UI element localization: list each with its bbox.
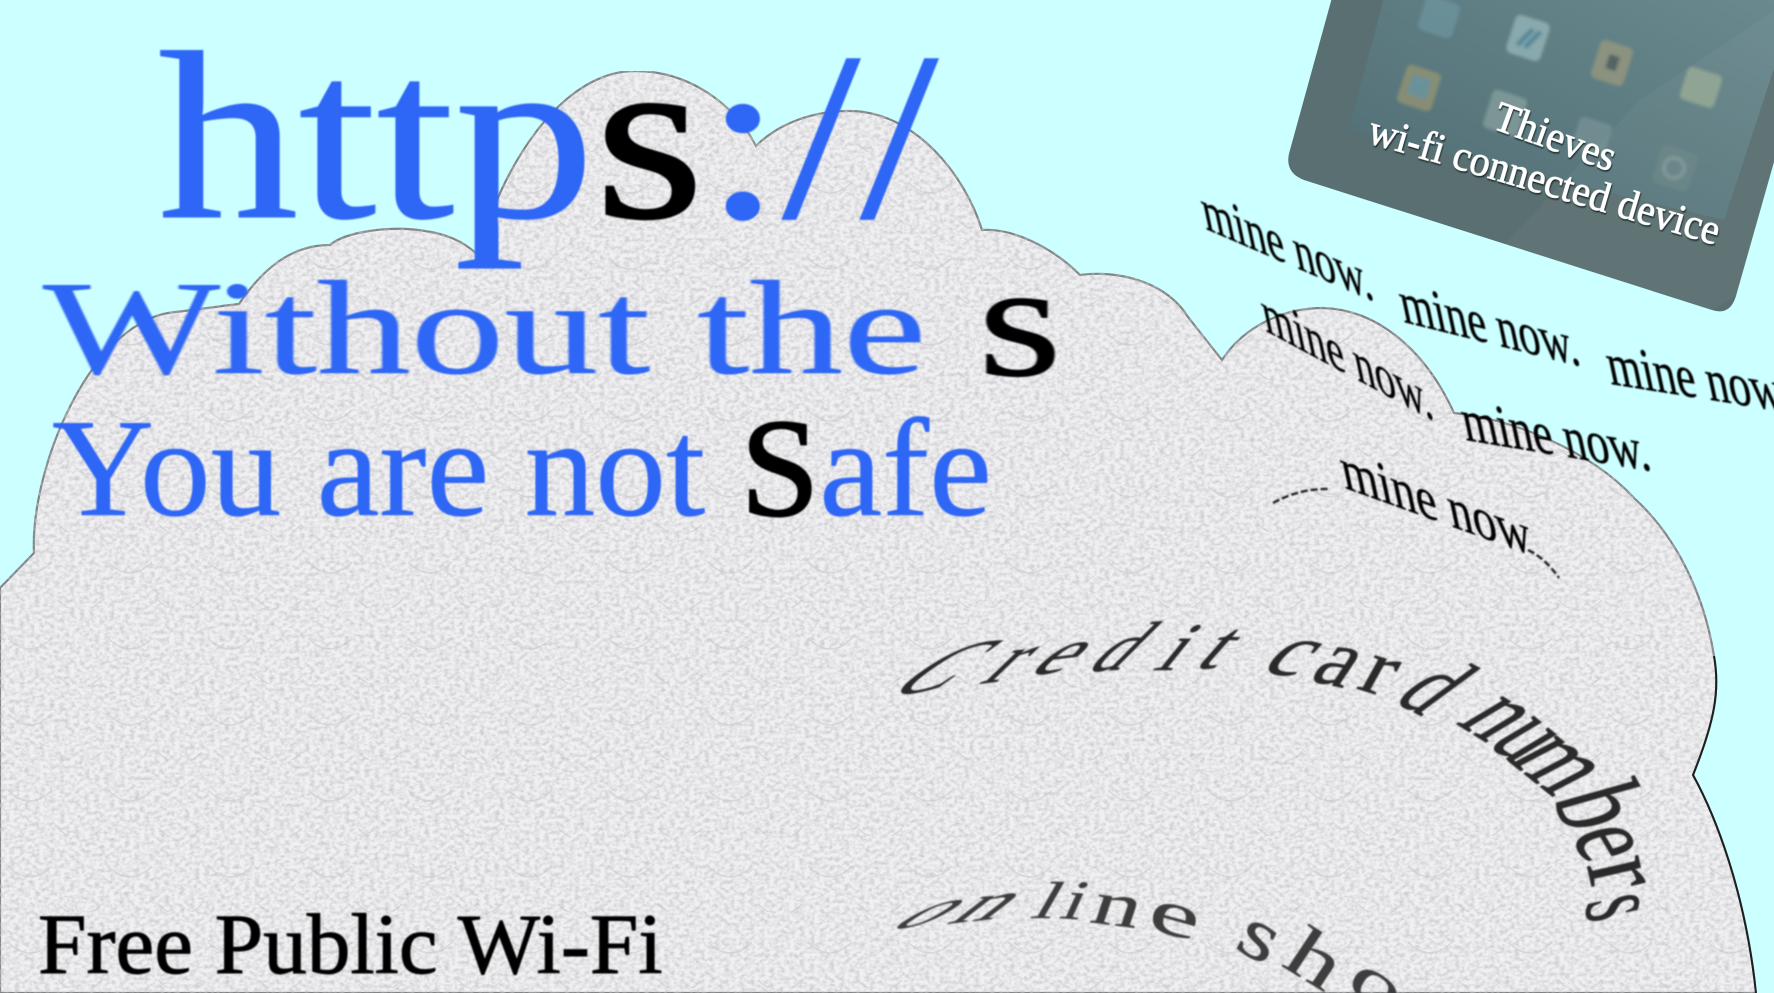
stolen data: online shopping: i [1053, 869, 1101, 931]
stolen data: Credit card numbers: b [1525, 769, 1678, 842]
stolen data: online shopping: s [1225, 889, 1297, 981]
stolen data: online shopping: n [928, 867, 1059, 937]
stolen data: online shopping: n [1084, 869, 1153, 941]
stolen data: Credit card numbers: t [1179, 608, 1267, 684]
stolen data: online shopping: l [1022, 872, 1078, 930]
stolen data: Credit card numbers: d [1068, 607, 1181, 688]
icon: thieves' tablet [1288, 0, 1774, 311]
stolen data: Credit card numbers: C [859, 621, 1035, 715]
stolen data: Credit card numbers: u [1465, 690, 1604, 779]
stolen data: online shopping: e [1143, 873, 1208, 955]
label: Thieves: Thieves [1488, 92, 1623, 180]
app icons [1396, 0, 1723, 193]
text: Free Public Wi-Fi: Free Public Wi-Fi [38, 897, 663, 992]
stolen data: mine now [1194, 175, 1774, 578]
stolen data: Credit card numbers: r [1346, 624, 1419, 713]
stolen data: Credit card numbers [859, 607, 1691, 931]
stolen data: online shopping: o [864, 874, 1013, 944]
stolen data: mine now: mine now. [1194, 175, 1378, 315]
stolen data: Credit card numbers: e [1008, 613, 1129, 691]
heading: You are not Safe: You are not Safe [52, 392, 992, 546]
stolen data: Credit card numbers: m [1484, 711, 1647, 809]
stolen data: Credit card numbers: s [1563, 880, 1686, 931]
stolen data: Credit card numbers: e [1545, 809, 1684, 872]
stolen data: mine now: mine now [1334, 434, 1537, 570]
stolen data: mine now: mine now. [1454, 385, 1656, 485]
stolen data: online shopping [864, 867, 1420, 993]
title: https://: https:// [158, 4, 939, 269]
stolen data: Credit card numbers: d [1372, 642, 1501, 731]
stolen data: Credit card numbers: n [1433, 670, 1576, 756]
stolen data: mine now: mine now. [1254, 277, 1438, 435]
heading: Without the: Without the [43, 255, 926, 403]
stolen data: Credit card numbers: i [1140, 609, 1222, 685]
heading: black s: s [978, 231, 1062, 411]
label: wi-fi connected device: wi-fi connected device [1363, 106, 1726, 254]
stolen data: Credit card numbers: a [1297, 613, 1388, 705]
stolen data: Credit card numbers: r [961, 617, 1071, 700]
stolen data: mine now: mine now. [1392, 268, 1585, 380]
stolen data: Credit card numbers: c [1244, 609, 1354, 692]
stolen data: Credit card numbers: r [1562, 843, 1691, 901]
